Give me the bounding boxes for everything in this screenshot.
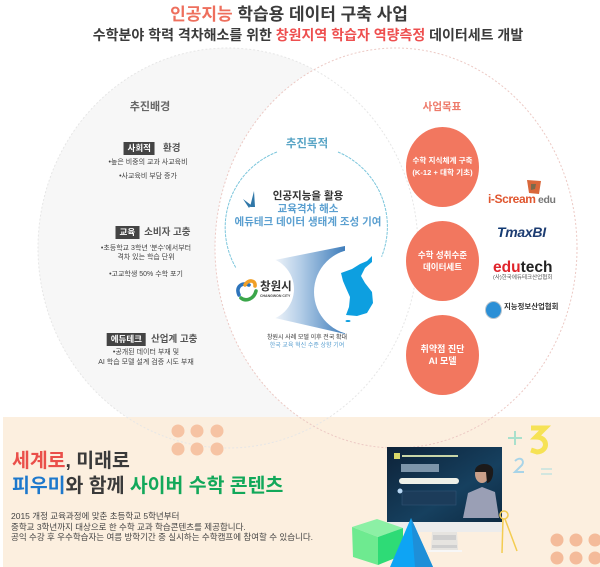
text: edutech bullets bbox=[98, 348, 194, 366]
association name: 지능정보산업협회 bbox=[504, 302, 558, 311]
icon: changwon logo bbox=[238, 281, 256, 300]
goal circle 2 bbox=[406, 221, 479, 301]
subtitle: 수학분야 학력 격차해소를 위한 창원지역 학습자 역량측정 데이터세트 개발 bbox=[93, 27, 523, 43]
heading: education consumers bbox=[116, 226, 190, 239]
banner description: 2015 개정 교육과정에 맞춘 초등학교 5학년부터 bbox=[11, 511, 179, 521]
text: edutech bullets: AI 학습 모델 설계 검증 시도 부재 bbox=[98, 359, 194, 366]
logo text: edutech bbox=[493, 259, 552, 276]
logo: changwon city: 창원시 bbox=[260, 281, 292, 293]
heading: project goals: 사업목표 bbox=[423, 101, 461, 113]
text: social bullets bbox=[108, 158, 188, 180]
changwon circle bbox=[230, 257, 294, 321]
text: map caption bbox=[267, 334, 347, 349]
dots bottom right bbox=[550, 534, 600, 564]
compass bbox=[500, 511, 517, 553]
cube bbox=[352, 519, 403, 565]
heading: edutech industry: 에듀테크 bbox=[111, 334, 142, 344]
gradient connector bbox=[275, 246, 345, 334]
goal circle 2: 데이터세트 bbox=[423, 262, 462, 272]
purpose arc bbox=[225, 152, 387, 268]
logo text: i-Scream edu bbox=[488, 192, 556, 206]
banner description bbox=[11, 511, 313, 542]
banner heading: 피우미와 함께 사이버 수학 콘텐츠 bbox=[12, 475, 283, 497]
text: social bullets: •사교육비 부담 증가 bbox=[119, 173, 177, 180]
goal circle 1: 수학 지식체계 구축 bbox=[412, 156, 473, 165]
heading: purpose: 추진목적 bbox=[286, 138, 328, 150]
icon: association mark bbox=[485, 301, 502, 319]
goal circle 1: (K-12 + 대학 기초) bbox=[412, 168, 473, 177]
text: map caption: 창원시 사례 모델 이후 전국 확대 bbox=[267, 335, 347, 341]
goal circle 3: AI 모델 bbox=[428, 356, 457, 366]
cone bbox=[390, 518, 433, 567]
block: edutech industry bbox=[98, 333, 197, 366]
text: purpose statement bbox=[235, 190, 381, 228]
icon: i-scream mark bbox=[527, 180, 541, 194]
goal circle 3 bbox=[406, 315, 479, 395]
goal circle 2: 수학 성취수준 bbox=[418, 250, 467, 260]
heading: social environment: 사회적 bbox=[128, 143, 151, 153]
text: education bullets: 격차 있는 학습 단위 bbox=[117, 254, 175, 261]
heading: background: 추진배경 bbox=[130, 101, 170, 113]
korea circle bbox=[314, 249, 400, 335]
monitor bbox=[387, 447, 502, 552]
text: edutech bullets: •공개된 데이터 부재 및 bbox=[113, 349, 179, 356]
text: purpose statement: 교육격차 해소 bbox=[278, 203, 338, 215]
banner heading: 세계로, 미래로 bbox=[12, 450, 130, 472]
logo: edutech bbox=[493, 259, 552, 281]
logo: changwon city subtitle: CHANGWON CITY bbox=[260, 294, 290, 298]
logo: ai association bbox=[485, 301, 558, 319]
icon: korea map bbox=[341, 256, 373, 322]
logo subtitle: (사)한국에듀테크산업협회 bbox=[493, 275, 552, 281]
banner heading bbox=[12, 450, 283, 497]
logo: tmaxbi: TmaxBI bbox=[497, 224, 546, 240]
bottom banner background bbox=[3, 417, 600, 567]
text: purpose statement: 인공지능을 활용 bbox=[273, 190, 343, 202]
heading: education consumers: 소비자 고충 bbox=[144, 227, 190, 238]
heading: education consumers: 교육 bbox=[120, 227, 135, 237]
block: social environment bbox=[108, 142, 188, 180]
heading: edutech industry: 산업계 고충 bbox=[151, 334, 197, 345]
text: social bullets: •높은 비중의 교과 사교육비 bbox=[108, 159, 188, 166]
text: education bullets: •고교학생 50% 수학 포기 bbox=[109, 271, 183, 278]
title: 인공지능 학습용 데이터 구축 사업 bbox=[170, 5, 408, 24]
emphasis icon bbox=[243, 191, 255, 208]
text: purpose statement: 에듀테크 데이터 생태계 조성 기여 bbox=[235, 216, 381, 228]
banner description: 공익 수강 후 우수학습자는 여름 방학기간 중 실시하는 수학캠프에 참여할 수 있습니다. bbox=[11, 532, 313, 542]
math symbols bbox=[508, 428, 552, 474]
heading: social environment: 환경 bbox=[163, 143, 180, 154]
presenter bbox=[463, 464, 499, 518]
text: map caption: 한국 교육 혁신 수준 상향 기여 bbox=[270, 343, 344, 349]
goal circle 3: 취약점 진단 bbox=[421, 344, 464, 354]
heading: social environment bbox=[124, 142, 180, 155]
block: education consumers bbox=[101, 226, 191, 278]
text: education bullets bbox=[101, 244, 191, 278]
logo: i-scream edu bbox=[488, 180, 556, 206]
text: education bullets: •초등학교 3학년 '분수'에서부터 bbox=[101, 245, 191, 252]
banner description: 중학교 3학년까지 대상으로 한 수학 교과 학습콘텐츠를 제공합니다. bbox=[11, 522, 246, 532]
goal circle 1 bbox=[406, 127, 479, 207]
heading: edutech industry bbox=[106, 333, 197, 346]
dots top bbox=[172, 424, 224, 456]
